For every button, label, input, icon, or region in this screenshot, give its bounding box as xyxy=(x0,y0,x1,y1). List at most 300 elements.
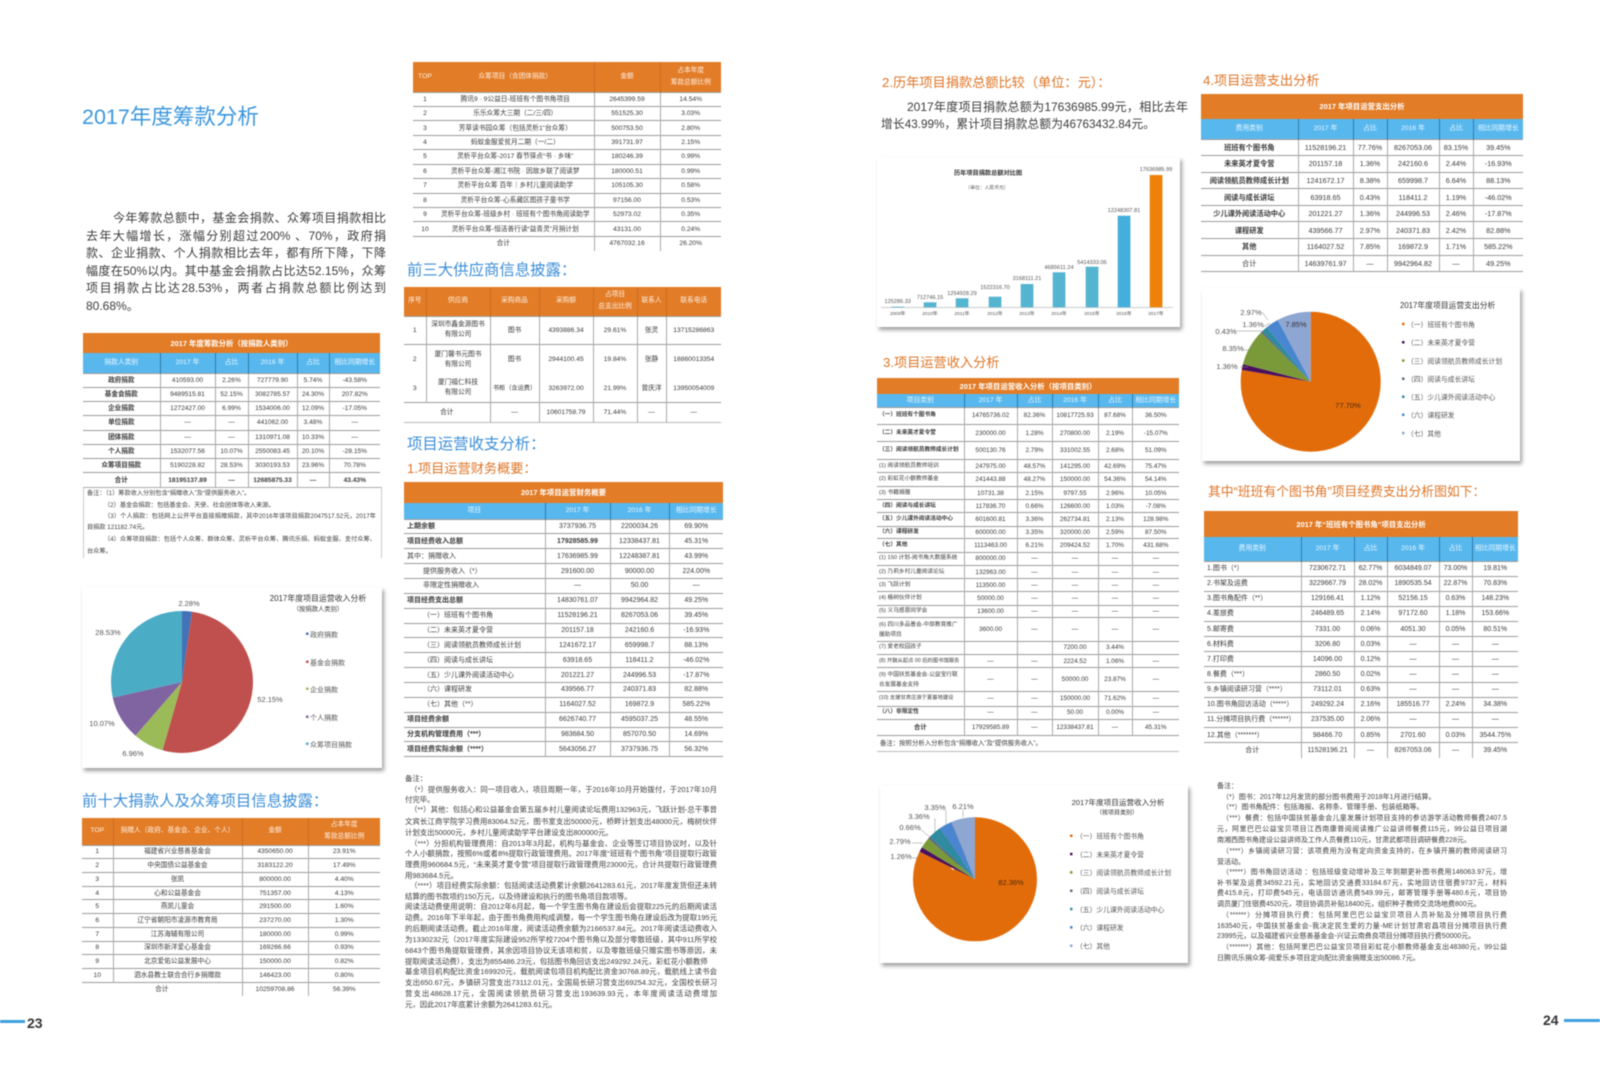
leader lines xyxy=(1237,312,1270,367)
table: reading corner expense: — xyxy=(1452,716,1459,723)
table: project financial overview: -46.02% xyxy=(683,657,709,664)
table: operating expense: 8267053.06 xyxy=(1394,143,1432,152)
table: operating expense: 88.13% xyxy=(1486,176,1510,185)
bar value labels: 4685611.24 xyxy=(1044,265,1074,271)
heading: top three suppliers: 前三大供应商信息披露： xyxy=(407,262,576,279)
table: reading corner expense: 2017 年 xyxy=(1316,545,1339,552)
table: reading corner expense: 1890535.54 xyxy=(1394,580,1431,587)
pie heading: 2017年度项目运营收入分析 xyxy=(270,593,366,603)
table: operating income by project: (3) 飞跃计划 xyxy=(879,582,910,588)
table: project financial overview: 相比同期增长 xyxy=(676,507,717,514)
table: top three suppliers: 厦门馨书元图书 xyxy=(435,351,481,358)
table: top ten crowdfunding projects: 合计 xyxy=(497,240,510,247)
table: project financial overview: 39.45% xyxy=(684,612,708,619)
pie labels: 7.85% xyxy=(1285,320,1307,329)
notes: reading corner expense footnotes: 日腾讯乐捐众筹-阅爱乐乡项目定向配比资金捐赠支出50086.7元。 xyxy=(1217,955,1420,962)
table: operating income by project: （四）阅读与成长讲坛 xyxy=(879,503,936,509)
table: reading corner expense: 9.乡镇阅读研习营（****） xyxy=(1207,686,1287,693)
table: top ten donors: 146423.00 xyxy=(259,972,291,979)
pie labels: 82.36% xyxy=(998,878,1024,887)
table: reading corner expense: — xyxy=(1452,671,1459,678)
table: top three suppliers: 总支出比例 xyxy=(598,303,632,310)
page number 23 xyxy=(0,1015,43,1031)
table: fundraising by donor type: — xyxy=(228,419,235,426)
table: top three suppliers: 3263972.00 xyxy=(548,385,584,392)
notes: financial overview footnotes: 动费。2016年下半年起，由于图书角费用构成调整，每一个学生图书角在建设后改为提取195元 xyxy=(405,913,717,922)
table: reading corner expense: 7230672.71 xyxy=(1309,565,1346,572)
table: operating income by project: 23.87% xyxy=(1104,676,1126,683)
table: reading corner expense: — xyxy=(1452,641,1459,648)
table: top ten crowdfunding projects: 灵析平台众筹-湘江书院 · 因故乡联了阅读梦 xyxy=(451,168,580,175)
table: operating expense xyxy=(1201,94,1523,272)
table: project financial overview: 118411.2 xyxy=(625,657,654,664)
page number 24 xyxy=(1542,1012,1600,1028)
table: project financial overview: 169872.9 xyxy=(625,701,654,708)
table: top three suppliers: 71.44% xyxy=(604,408,626,416)
table: operating income by project: 2.19% xyxy=(1106,430,1124,437)
table: top three suppliers: 占项目 xyxy=(605,291,625,298)
table: fundraising by donor type: 3030193.53 xyxy=(255,462,290,469)
table: operating income by project: 48.27% xyxy=(1024,476,1045,483)
pie labels: 0.43% xyxy=(1215,327,1237,336)
notes: financial overview footnotes: （**）其他：包括心和公益基金会第五届乡村儿童阅读论坛费用132963元，飞跃计划-总干事曾 xyxy=(410,805,717,814)
table: operating income by project: 113500.00 xyxy=(976,582,1005,589)
table: reading corner expense: — xyxy=(1452,747,1459,754)
table: top ten donors: 17.49% xyxy=(333,862,356,869)
table: operating income by project: 42.69% xyxy=(1104,463,1126,470)
table: reading corner expense: 129166.41 xyxy=(1311,595,1344,602)
table: operating income by project: 合发展基金支持 xyxy=(879,682,919,688)
table: top ten crowdfunding projects: 8 xyxy=(423,197,427,204)
table: reading corner expense: 39.45% xyxy=(1483,747,1507,754)
table: top ten donors: 1 xyxy=(95,848,99,855)
pie labels: 1.26% xyxy=(890,852,912,861)
table: reading corner expense: 52156.15 xyxy=(1398,595,1428,602)
table: fundraising by donor type xyxy=(83,333,380,487)
table: operating income by project: 1.03% xyxy=(1106,503,1124,510)
table: top ten donors: 4350650.00 xyxy=(257,848,293,855)
text block: historical donation summary xyxy=(881,100,1188,131)
table: project financial overview xyxy=(404,482,723,757)
table: project financial overview: 项目 xyxy=(467,507,481,514)
table: fundraising by donor type: 2017 年度筹款分析（按捐款人类别） xyxy=(171,338,292,348)
table: project financial overview: 224.00% xyxy=(682,568,710,574)
table: project financial overview: 17928585.99 xyxy=(557,538,598,545)
table: operating income by project: 3.36% xyxy=(1025,516,1044,523)
table: operating expense: 0.43% xyxy=(1360,193,1380,202)
text block: historical donation summary: 增长43.99%，累计项目捐款总额为46763432.84元。 xyxy=(881,118,1155,131)
notes: financial overview footnotes: 阅读活动费使用说明：自2012年6月起，每一个学生图书角在建设后会提取225元的后期阅读活 xyxy=(405,902,717,911)
table: reading corner expense: 相比同期增长 xyxy=(1475,545,1516,552)
table: reading corner expense: 0.63% xyxy=(1446,595,1465,602)
table: operating income by project: 援助项目 xyxy=(879,632,902,638)
pie legend: （七）其他 xyxy=(1076,942,1110,950)
table: operating income by project: 10731.38 xyxy=(977,490,1004,496)
text block: fundraising summary: 幅度在50%以内。其中基金会捐款占比达52.15%，众筹 xyxy=(86,264,386,278)
table: top three suppliers: 曾庆洋 xyxy=(641,385,662,392)
heading: operating income analysis: 3.项目运营收入分析 xyxy=(883,355,1000,370)
table: reading corner expense: 73112.01 xyxy=(1313,686,1342,693)
table: top three suppliers: 有限公司 xyxy=(445,331,471,338)
table: operating income by project: 10817725.93 xyxy=(1056,412,1094,419)
table: operating expense: 1.36% xyxy=(1360,159,1380,168)
table: operating expense: 14639761.97 xyxy=(1304,259,1346,268)
table: top ten crowdfunding projects: 2 xyxy=(423,110,427,117)
table: reading corner expense: 73.00% xyxy=(1444,565,1467,572)
bar value labels: 3168111.21 xyxy=(1013,276,1041,282)
table: reading corner expense: — xyxy=(1492,671,1499,678)
table: operating expense: 82.88% xyxy=(1486,226,1510,235)
table: operating income by project: 2017 年项目运营收入分析（按项目类别） xyxy=(960,382,1096,390)
table: top ten crowdfunding projects: 灵析平台众筹-班级乡村 · 班班有个图书角阅读助学 xyxy=(441,211,590,218)
table: project financial overview: 291600.00 xyxy=(561,568,594,574)
table: project financial overview: 项目经费实际余额（****） xyxy=(407,746,488,753)
table: top ten donors: 291500.00 xyxy=(259,903,291,910)
heading: top ten donors: 前十大捐款人及众筹项目信息披露： xyxy=(82,793,328,810)
table: operating income by project: — xyxy=(1031,658,1038,665)
table: operating income by project: 45.31% xyxy=(1145,724,1167,731)
table: project financial overview: 14.69% xyxy=(684,731,708,738)
table: top three suppliers: 书柜（含运费） xyxy=(493,385,536,392)
table: operating expense: -46.02% xyxy=(1485,193,1512,202)
table: reading corner expense: 185516.77 xyxy=(1396,701,1430,708)
table: operating income by project: (9) 中国扶贫基金会-公益宝行联 xyxy=(879,672,958,678)
pie legend: （四）阅读与成长讲坛 xyxy=(1076,886,1144,896)
table: reading corner expense: 1.12% xyxy=(1361,595,1380,602)
table: top ten donors: 捐赠人（政府、基金会、企业、个人） xyxy=(121,827,234,834)
table: fundraising by donor type: -28.15% xyxy=(342,448,367,455)
table: top ten crowdfunding projects: 0.24% xyxy=(681,226,700,233)
notes: financial overview footnotes: 文宾长江商学院学习费用83064.52元，图书室支出50000元，桥畔计划支出48000元，梅树伙伴 xyxy=(405,817,717,826)
table: reading corner expense: 3206.80 xyxy=(1315,641,1340,648)
table: operating expense: 少儿课外阅读活动中心 xyxy=(1213,209,1285,218)
table: operating income by project: — xyxy=(1153,582,1159,589)
table: operating expense: 6.64% xyxy=(1446,176,1466,185)
table: top ten donors: 辽宁省朝阳市凌源市教育局 xyxy=(137,917,218,924)
table: operating income by project: — xyxy=(1153,595,1159,602)
page number 24: 24 xyxy=(1543,1012,1559,1028)
table: top three suppliers: 厦门福仁科技 xyxy=(438,379,478,386)
table: top ten donors: 4.40% xyxy=(335,876,354,883)
table: operating income by project: 2.79% xyxy=(1025,447,1044,454)
table: operating income by project: 0.00% xyxy=(1106,709,1124,716)
table: reading corner expense: — xyxy=(1410,656,1416,663)
table: operating income by project: 601600.81 xyxy=(975,516,1006,523)
table: top three suppliers: 1 xyxy=(413,326,417,334)
notes: financial overview footnotes: 计划支出50000元，乡村儿童阅读助学平台建设支出800000元。 xyxy=(405,828,613,837)
table: operating income by project: — xyxy=(1072,555,1078,562)
table: project financial overview: — xyxy=(693,582,700,589)
table: reading corner expense: — xyxy=(1452,686,1459,693)
table: fundraising by donor type: 441062.00 xyxy=(257,419,288,426)
table: operating expense: 占比 xyxy=(1363,125,1377,132)
table: reading corner expense: 10.图书角回访活动（*****） xyxy=(1207,701,1293,708)
table: operating income by project: — xyxy=(1031,695,1038,702)
text block: fundraising summary xyxy=(86,211,386,313)
table: project financial overview: 项目经费余额 xyxy=(407,716,449,723)
pie slices xyxy=(1276,347,1346,417)
table: reading corner expense: — xyxy=(1492,686,1499,693)
text block: fundraising summary: 去年大幅增长，涨幅分别超过200% 、70%，政府捐 xyxy=(86,229,386,243)
notes: reading corner expense footnotes: （*）图书：2017年12月发货的部分图书费用于2018年1月进行结算。 xyxy=(1222,794,1436,801)
table: top ten crowdfunding projects: 灵析平台众筹 百年｜乡村儿童阅读助学 xyxy=(457,182,573,189)
table: operating expense: 2.97% xyxy=(1360,226,1380,235)
pie legend: （五）少儿课外阅读活动中心 xyxy=(1076,905,1165,914)
table: operating income by project: — xyxy=(1153,709,1159,716)
table: operating income by project: 500130.76 xyxy=(975,447,1006,454)
table: operating expense: 11528196.21 xyxy=(1305,143,1346,152)
table: top three suppliers: 合计 xyxy=(440,408,453,416)
table: operating income by project: 54.14% xyxy=(1145,476,1167,483)
table: project financial overview: 17636985.99 xyxy=(557,553,598,560)
table: reading corner expense: — xyxy=(1492,716,1499,723)
table: operating income by project: — xyxy=(1112,724,1118,731)
table: fundraising by donor type: 52.15% xyxy=(220,391,243,398)
table: top ten crowdfunding projects: 占本年度 xyxy=(677,67,704,74)
text block: fundraising summary: 款、企业捐款、个人捐款相比去年，都有所下降，下降 xyxy=(86,246,386,260)
table: reading corner expense: 2.书架及运费 xyxy=(1207,580,1248,587)
table: operating expense: 班班有个图书角 xyxy=(1224,143,1274,152)
table: top three suppliers: 21.99% xyxy=(604,385,626,392)
table: reading corner expense: 0.02% xyxy=(1361,671,1380,678)
panel: operating income pie chart xyxy=(880,785,1188,963)
text block: historical donation summary: 2017年度项目捐款总额为17636985.99元，相比去年 xyxy=(907,100,1188,114)
table: top ten donors: 金额 xyxy=(268,827,282,834)
table: project financial overview: 69.90% xyxy=(684,523,708,530)
table: top ten donors: 张凯 xyxy=(171,876,184,883)
table: operating income by project: 占比 xyxy=(1108,397,1122,404)
table: top ten crowdfunding projects: 4 xyxy=(423,139,427,146)
table: operating income by project: — xyxy=(1153,569,1159,576)
notes: reading corner expense footnotes: 南湘西图书角建设公益讲师及工作人员餐费110元，甘肃武都项目调研餐费228元。 xyxy=(1217,837,1471,844)
table: reading corner expense: 2017 年“班班有个图书角”项目支出分析 xyxy=(1296,520,1426,528)
text block: fundraising summary: 80.68%。 xyxy=(86,299,139,313)
notes: reading corner expense footnotes: 备注： xyxy=(1217,783,1238,790)
table: top three suppliers xyxy=(404,287,721,422)
table: operating income by project: 相比同期增长 xyxy=(1135,397,1176,404)
pie labels xyxy=(89,599,283,758)
table: top three suppliers: 图书 xyxy=(508,326,521,334)
table: top ten donors: 占本年度 xyxy=(331,821,358,828)
table: reading corner expense: 合计 xyxy=(1245,747,1259,754)
table: top three suppliers: 18860013354 xyxy=(673,356,714,363)
table: operating expense: 2.42% xyxy=(1446,226,1466,235)
table: fundraising by donor type: 23.96% xyxy=(302,462,324,469)
table: project financial overview: 上期余额 xyxy=(407,523,435,530)
notes: financial overview footnotes: 的后期阅读活动费。截止2016年度，阅读活动费余额为2166537.84元。2017年阅读活动费收入 xyxy=(405,924,717,933)
notes: reading corner expense footnotes: （****）乡镇阅读研习营：该项费用为没有定向资金支持的，在乡镇开展的教师阅读研习 xyxy=(1222,848,1507,855)
table: reading corner expense: 0.12% xyxy=(1361,656,1380,663)
heading: reading corner expense analysis: 其中“班班有个图书角”项目经费支出分析图如下： xyxy=(1208,484,1485,499)
pie legend: （六）课程研发 xyxy=(1407,411,1455,420)
table: reading corner expense: — xyxy=(1452,656,1459,663)
pie legend: （一）班班有个图书角 xyxy=(1076,832,1144,840)
table: reading corner expense: 1.图书（*） xyxy=(1207,565,1244,572)
table: top three suppliers: 有限公司 xyxy=(445,389,471,396)
table: reading corner expense: — xyxy=(1410,716,1416,723)
table: top three suppliers: 采购额 xyxy=(556,297,576,304)
table: fundraising by donor type: — xyxy=(228,434,235,441)
table: project financial overview: 49.25% xyxy=(684,597,708,604)
table: fundraising by donor type: -43.58% xyxy=(342,377,367,384)
table: fundraising by donor type: — xyxy=(351,419,358,426)
notes: reading corner expense footnotes: 元，阿里巴巴公益宝贝项目江西南康普阅阅读推广公益讲师餐费115元，99公益日项目湖 xyxy=(1217,826,1507,833)
notes: financial overview footnotes: 个人小额捐款，按照6%或者8%提取行政管理费用。2017年度“班班有个图书角”项目提取行政管 xyxy=(405,849,717,858)
table: reading corner expense: 98466.70 xyxy=(1313,732,1342,739)
table: fundraising by donor type: 企业捐款 xyxy=(108,405,134,412)
table: top three suppliers: 29.61% xyxy=(604,326,626,334)
table: fundraising by donor type: 410593.00 xyxy=(172,377,203,384)
table: operating income by project: — xyxy=(1153,608,1159,615)
table: operating income by project: 3600.00 xyxy=(979,626,1002,633)
table: reading corner expense: 2.06% xyxy=(1361,716,1380,723)
table: project financial overview: 82.88% xyxy=(684,686,708,693)
pie heading: 2017年度项目运营收入分析 xyxy=(1072,797,1165,807)
table: top ten donors: 751357.00 xyxy=(259,890,291,897)
pie heading xyxy=(1072,797,1165,816)
table: operating income by project: 13600.00 xyxy=(977,608,1004,615)
table: operating expense: 2017 年 xyxy=(1314,125,1337,132)
table: operating expense: 242160.6 xyxy=(1398,159,1428,168)
table: top three suppliers: 序号 xyxy=(408,297,421,304)
year labels: 2011年 xyxy=(954,310,970,317)
table: top three suppliers: — xyxy=(511,408,518,416)
table: reading corner expense: 97172.60 xyxy=(1398,610,1428,617)
table: reading corner expense: 80.51% xyxy=(1483,626,1507,633)
table: operating expense: 其他 xyxy=(1242,242,1256,251)
table: reading corner expense: 0.06% xyxy=(1361,626,1380,633)
table: project financial overview: 8267053.06 xyxy=(621,612,658,619)
table: operating expense: 2016 年 xyxy=(1401,125,1425,132)
table: top ten donors: 6 xyxy=(95,917,99,924)
table: reading corner expense: 0.63% xyxy=(1361,686,1380,693)
table: operating income by project: 320000.00 xyxy=(1060,529,1090,536)
table: top ten crowdfunding projects: 0.99% xyxy=(681,153,700,160)
table: operating income by project: 9797.55 xyxy=(1063,490,1087,496)
chart heading xyxy=(954,169,1022,191)
table: operating income by project: — xyxy=(1031,676,1038,683)
table: project financial overview: 项目经费支出总额 xyxy=(407,597,463,604)
notes under fundraising table: （2）基金会捐款：包括基金会、天使、社会团体等收入来源。 xyxy=(104,502,275,509)
table: reading corner expense xyxy=(1204,511,1518,758)
table: project financial overview: （六）课程研发 xyxy=(423,686,472,693)
table: operating income by project: — xyxy=(1153,626,1159,633)
table: operating income by project: 1.28% xyxy=(1025,430,1044,437)
table: top ten crowdfunding projects: 5 xyxy=(423,153,427,160)
table: operating income by project: (10) 支援甘肃庄浪宁夏基地建设 xyxy=(879,695,953,701)
chart heading: 历年项目捐款总额对比图 xyxy=(954,169,1022,177)
table: top ten donors: 泗水县教士联合合行乡捐赠款 xyxy=(134,972,221,979)
table: operating income by project: — xyxy=(1112,595,1118,602)
pie labels xyxy=(1215,308,1361,410)
table: operating income by project: （一）班班有个图书角 xyxy=(879,412,936,418)
table: top ten donors: 0.93% xyxy=(335,944,354,951)
table: top ten crowdfunding projects: 2.80% xyxy=(681,125,700,132)
year labels: 2013年 xyxy=(1019,310,1035,317)
table: project financial overview: 2017 年 xyxy=(566,507,589,514)
axis xyxy=(881,306,1173,308)
table: operating income by project: — xyxy=(1031,569,1038,576)
table: reading corner expense: 2.14% xyxy=(1361,610,1380,617)
table: top ten donors: 0.80% xyxy=(335,972,354,979)
table: top three suppliers: 4393886.34 xyxy=(548,326,584,334)
table: project financial overview: 1164027.52 xyxy=(559,701,596,708)
table: operating income by project: (3) 书籍捐赠 xyxy=(879,490,910,496)
table: fundraising by donor type: 5.74% xyxy=(304,377,322,384)
table: operating expense: 1.36% xyxy=(1360,209,1380,218)
table: fundraising by donor type: — xyxy=(228,477,235,484)
table: operating income by project: (1) 150 计划-阅书角大数据系统 xyxy=(879,555,957,561)
table: operating income by project: — xyxy=(1153,695,1159,702)
table: operating income by project: 合计 xyxy=(914,724,927,731)
table: operating expense: -16.93% xyxy=(1485,159,1512,168)
pie labels: 0.66% xyxy=(899,823,921,832)
notes: reading corner expense footnotes: 163540元，中国扶贫基金会-我决定民生爱的力量-ME计划甘肃宕昌项目分摊项目执行费 xyxy=(1217,923,1507,930)
table: top ten donors: 福建省兴业慈善基金会 xyxy=(144,848,211,855)
table: reading corner expense: 153.66% xyxy=(1481,610,1509,617)
table: operating income by project: — xyxy=(987,658,994,665)
notes: financial overview footnotes: 支出650.67元，乡镇研习营支出73112.01元，全国局长研习营支出69254.32元，全国校长研习 xyxy=(405,978,717,987)
table: top three suppliers: 张灵 xyxy=(645,326,658,334)
table: operating income by project: （三）阅读领航员教师成长计划 xyxy=(879,447,959,453)
notes: reading corner expense footnotes: 23995元，以及福建省兴业慈善基金会-兴证云南彝良项目分摊项目执行费50000元。 xyxy=(1217,933,1475,940)
table: project financial overview: 3737936.75 xyxy=(621,746,658,753)
table: fundraising by donor type: 基金会捐款 xyxy=(105,391,138,398)
table: reading corner expense: 1.18% xyxy=(1446,610,1465,617)
table: top ten crowdfunding projects: 2.15% xyxy=(681,139,700,146)
table: top ten crowdfunding projects: 2645399.59 xyxy=(609,96,645,103)
table: top ten donors: 169266.66 xyxy=(259,944,291,951)
table: operating income by project: (1) 阅读领航员教师培训 xyxy=(879,463,939,469)
table: top ten crowdfunding projects: 43131.00 xyxy=(613,226,641,233)
table: project financial overview: 242160.6 xyxy=(625,627,654,634)
table: operating income by project: 82.36% xyxy=(1024,412,1045,419)
table: project financial overview: 201157.18 xyxy=(561,627,594,634)
year labels: 2014年 xyxy=(1051,310,1067,317)
table: operating income by project: 247975.00 xyxy=(975,463,1006,470)
table: operating income by project: 241443.88 xyxy=(975,476,1006,483)
table: reading corner expense: 11528196.21 xyxy=(1307,747,1348,754)
pie slices xyxy=(944,848,1006,910)
table: project financial overview: 分支机构管理费用（***） xyxy=(407,731,485,738)
table: top ten donors: 5 xyxy=(95,903,99,910)
notes under fundraising table: 台众筹。 xyxy=(87,548,112,555)
bar value labels: 5414333.06 xyxy=(1077,260,1107,266)
table: operating expense: 1164027.52 xyxy=(1307,242,1344,251)
table: operating income by project: 128.98% xyxy=(1143,516,1168,523)
table: top ten donors: 3 xyxy=(95,876,99,883)
table: top ten crowdfunding projects: 筹款总额比例 xyxy=(671,79,711,86)
table: reading corner expense: — xyxy=(1410,671,1416,678)
table: operating income by project: （七）其他 xyxy=(879,542,907,548)
table: operating income by project: — xyxy=(987,709,994,716)
panel: historical donation bar chart xyxy=(877,157,1180,327)
notes: reading corner expense footnotes: 调员厦门住宿费4520元，项目协调员补贴18400元，组织种子教师交流场地费800元。 xyxy=(1217,901,1481,908)
table: top ten donors: 180000.00 xyxy=(259,931,291,938)
table: fundraising by donor type: 2016 年 xyxy=(261,359,284,366)
table: operating income by project: 50.00 xyxy=(1067,709,1083,716)
pie legend: 个人捐款 xyxy=(310,713,338,722)
table: operating expense: 240371.83 xyxy=(1396,226,1430,235)
table: reading corner expense: 12.其他（*******） xyxy=(1207,732,1264,739)
notes: financial overview footnotes: 元，因此2017年底累计余额为2641283.61元。 xyxy=(405,1000,557,1009)
table: top ten donors: 1.60% xyxy=(335,903,354,910)
table: top ten crowdfunding projects: 500753.50 xyxy=(611,125,643,132)
table: fundraising by donor type: 单位捐款 xyxy=(108,419,134,426)
pie legend: （五）少儿课外阅读活动中心 xyxy=(1407,393,1496,402)
table: fundraising by donor type: 捐款人类别 xyxy=(104,359,138,366)
table: project financial overview: 2200034.26 xyxy=(621,523,658,530)
